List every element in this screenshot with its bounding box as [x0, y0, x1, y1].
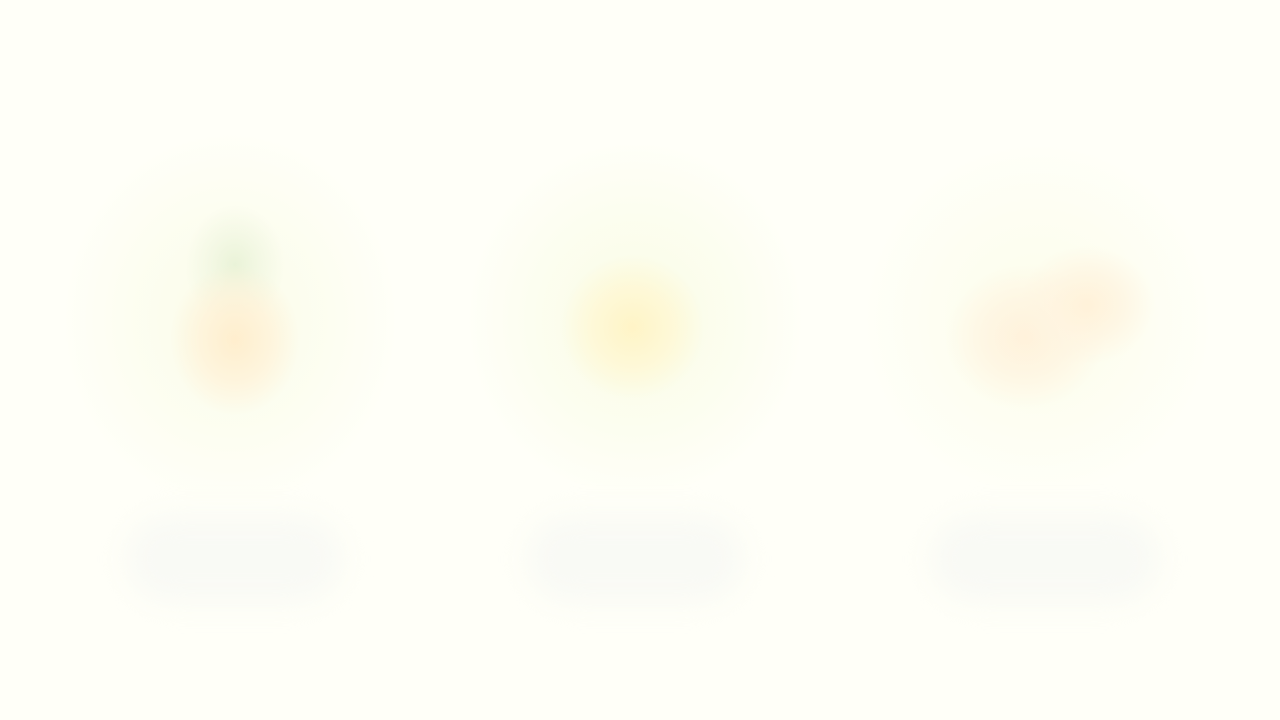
label pill: right: [930, 515, 1160, 603]
icon halo: middle: [465, 140, 805, 500]
label pill: middle: [526, 515, 744, 603]
icon: carrot body: [170, 265, 300, 415]
icon halo: right: [860, 140, 1215, 500]
icon: orange shape lower: [945, 265, 1105, 410]
icon: orange shape upper: [1020, 245, 1155, 365]
icon: yellow fruit: [560, 255, 705, 400]
label pill: left: [125, 515, 343, 603]
icon: carrot leaves: [185, 205, 285, 325]
icon halo: left: [60, 130, 400, 510]
